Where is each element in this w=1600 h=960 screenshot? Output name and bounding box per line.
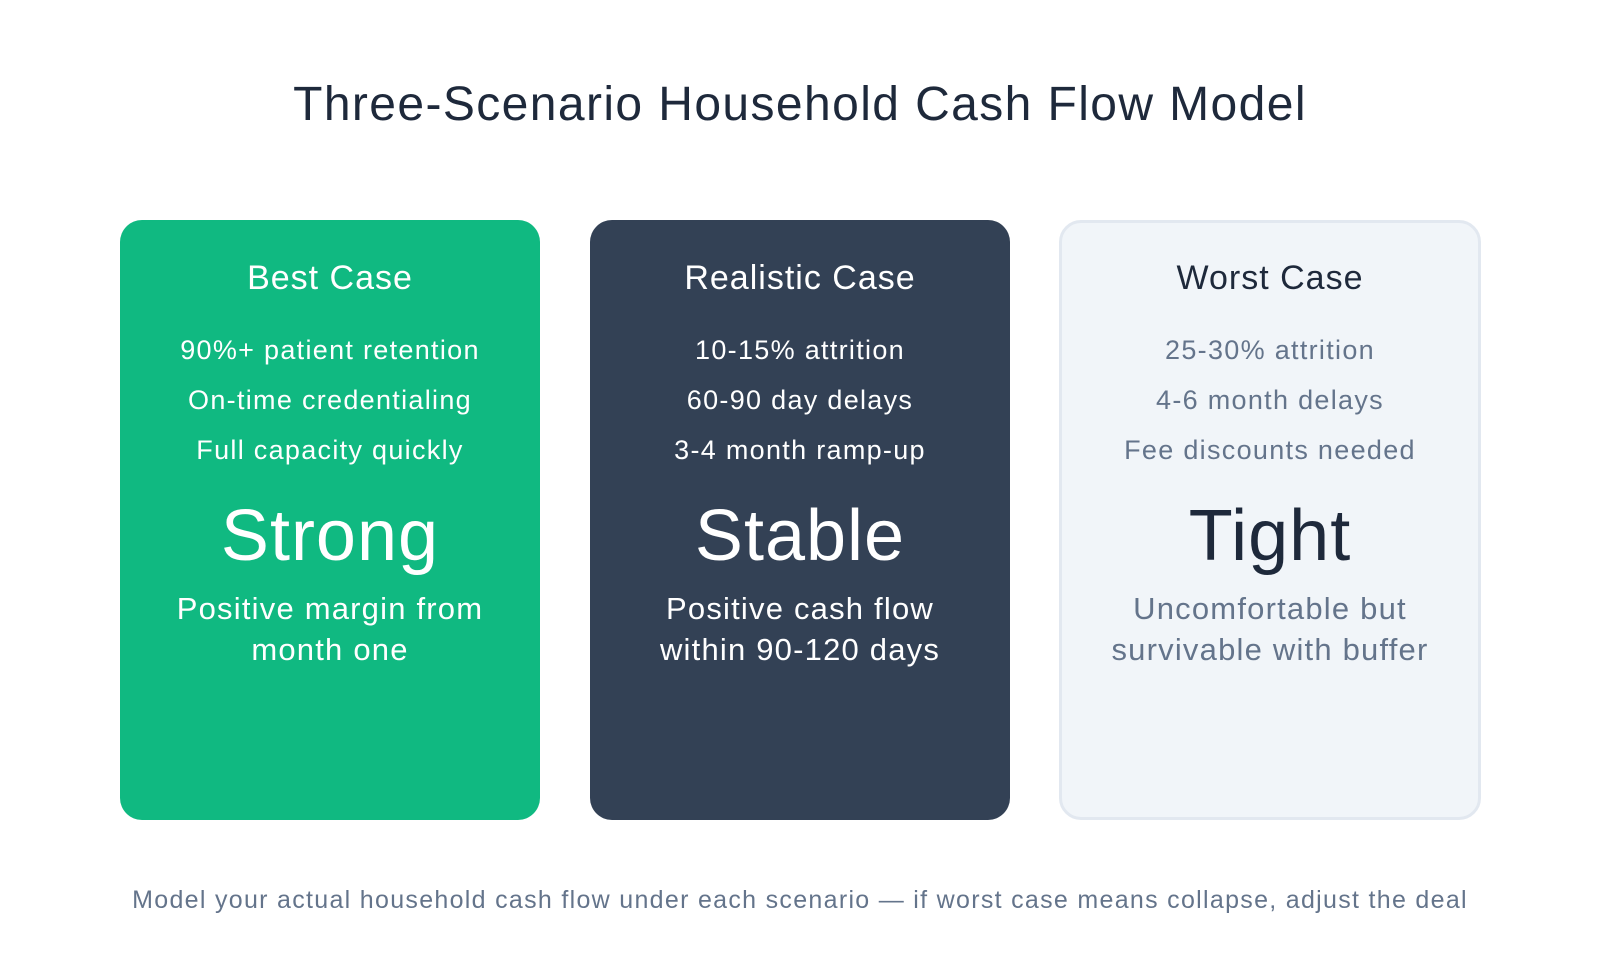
bullets: 90%+ patient retention	[180, 335, 480, 365]
bullets: 3-4 month ramp-up	[674, 435, 926, 465]
bullets: 25-30% attrition	[1165, 335, 1375, 365]
description: Positive margin from	[177, 591, 483, 626]
heading: Worst Case	[1176, 259, 1363, 297]
description	[177, 591, 483, 667]
description	[660, 591, 940, 667]
bullets: On-time credentialing	[188, 385, 472, 415]
bullets	[1124, 335, 1416, 465]
panel: worst case	[1059, 220, 1481, 820]
description: month one	[251, 632, 409, 667]
bullets: Full capacity quickly	[196, 435, 464, 465]
panel: realistic case	[590, 220, 1010, 820]
heading: Realistic Case	[684, 259, 916, 297]
bullets: 60-90 day delays	[687, 385, 913, 415]
bullets	[180, 335, 480, 465]
heading: Best Case	[247, 259, 413, 297]
big word: Stable	[695, 496, 905, 576]
description: Uncomfortable but	[1133, 591, 1407, 626]
bullets: Fee discounts needed	[1124, 435, 1416, 465]
bullets: 10-15% attrition	[695, 335, 905, 365]
footer note: Model your actual household cash flow under each scenario — if worst case means collapse, adjust the deal	[132, 886, 1468, 914]
title: Three-Scenario Household Cash Flow Model	[293, 78, 1307, 131]
bullets	[674, 335, 926, 465]
description: within 90-120 days	[660, 632, 940, 667]
panel: best case	[120, 220, 540, 820]
bullets: 4-6 month delays	[1156, 385, 1384, 415]
description	[1111, 591, 1429, 667]
description: survivable with buffer	[1111, 632, 1429, 667]
description: Positive cash flow	[666, 591, 934, 626]
big word: Strong	[221, 496, 439, 576]
big word: Tight	[1189, 496, 1351, 576]
